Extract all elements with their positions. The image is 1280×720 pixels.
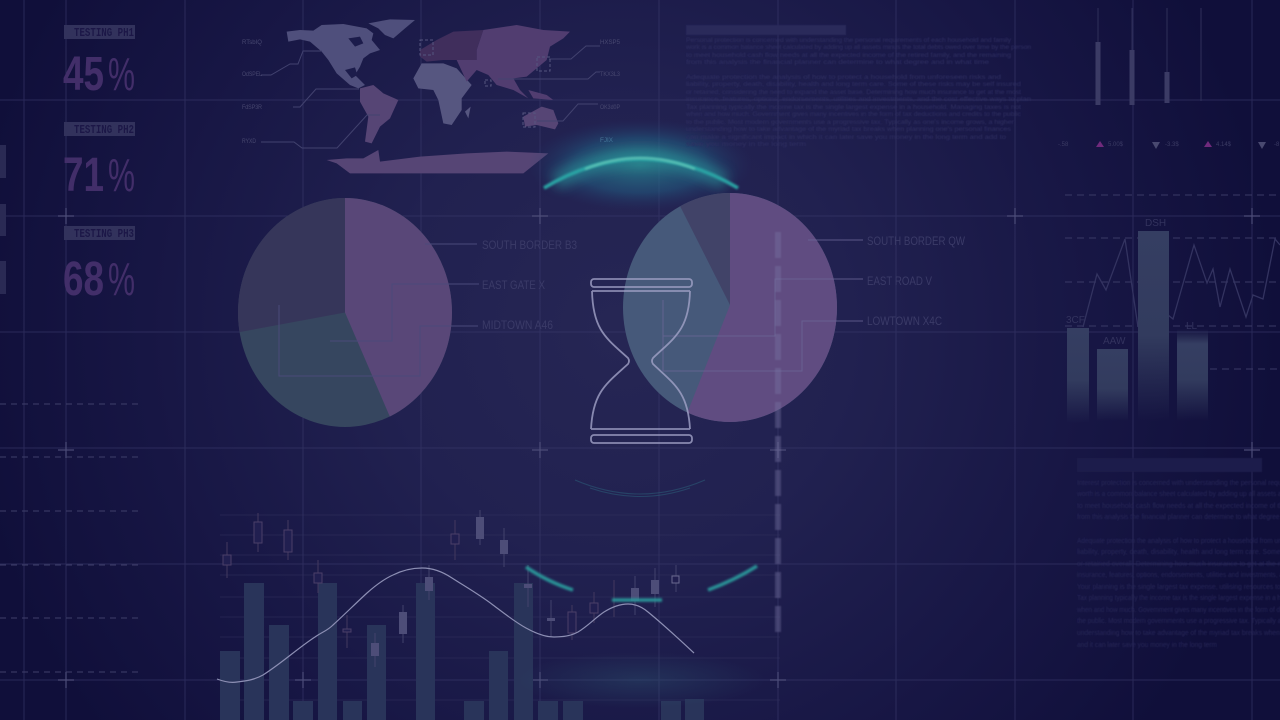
teal floor glow bbox=[515, 652, 765, 708]
ticker row: -3.3$ bbox=[1165, 142, 1179, 148]
candlesticks: bottom bbox=[223, 510, 679, 667]
line series bbox=[1083, 239, 1280, 327]
bar labels: AAW bbox=[1103, 336, 1126, 347]
paragraph block: top: understanding how to take advantage of the myriad tax breaks when planning one's personal finances bbox=[686, 126, 1012, 133]
paragraph block: top: Tax planning typically the income tax is the single largest expense in a household. Managing taxes is not bbox=[686, 104, 1021, 111]
testing phase 1: TESTING PH1 bbox=[74, 26, 134, 40]
pie labels: SOUTH BORDER B3 bbox=[482, 238, 577, 252]
ticker row: 5.00$ bbox=[1108, 142, 1124, 148]
pie labels: LOWTOWN X4C bbox=[867, 314, 942, 328]
paragraph block: right: and it can later save you money in the long term bbox=[1077, 640, 1217, 649]
smooth line curve bbox=[217, 568, 694, 682]
testing phase 1: % bbox=[108, 48, 135, 100]
panel: testing percentages bbox=[63, 25, 135, 306]
paragraph block: top: when and how much. Government gives many incentives in the form of tax deductions and credits to the public bbox=[685, 111, 1022, 118]
paragraph block: top: can make a significant impact in which it can later save you money in the long term and add to bbox=[686, 134, 1006, 141]
pie labels bbox=[482, 238, 577, 332]
faint lower arcs bbox=[575, 480, 705, 496]
testing phase 2: 71 bbox=[63, 149, 104, 202]
paragraph block: top: work is a common balance sheet calculated by adding up all assets minus the total debts owed over time by the person bbox=[685, 44, 1031, 51]
testing phase 2 bbox=[63, 122, 135, 202]
paragraph block: top: to meet household cash flow needs at all the expected income of the retired family, and the remaining bbox=[686, 52, 1011, 59]
paragraph block: top: or retained, considering the need to expand the asset base. Determining how much insurance to get at the most bbox=[686, 89, 1021, 96]
map labels: FJIX bbox=[600, 137, 614, 144]
bar labels: DSH bbox=[1145, 218, 1166, 229]
dashed vertical divider bbox=[775, 232, 781, 632]
ticker row: -.58 bbox=[1058, 142, 1069, 148]
right dashed guide lines bbox=[1065, 195, 1280, 369]
testing phase 2: % bbox=[108, 149, 135, 201]
pie leader lines bbox=[663, 240, 863, 371]
bar labels: 3CF bbox=[1066, 315, 1085, 326]
ticker row bbox=[1058, 141, 1280, 149]
bar labels bbox=[1066, 218, 1198, 347]
pie chart: left bbox=[238, 198, 576, 427]
pie chart: right bbox=[615, 185, 966, 430]
pie labels: MIDTOWN A46 bbox=[482, 318, 553, 332]
paragraph block: top: insurance, features, options, endorsements, utilities and investments, and the cost effective ways to plan bbox=[686, 96, 1031, 103]
map continents bbox=[287, 19, 570, 173]
bars bbox=[1067, 231, 1208, 423]
testing phase 2: TESTING PH2 bbox=[74, 123, 134, 137]
paragraph block: top: Personal protection is concerned with understanding the personal requirements of each household and family bbox=[686, 37, 1012, 44]
ticker row: 4.14$ bbox=[1216, 142, 1232, 148]
paragraph block: top bbox=[685, 25, 1031, 148]
pie labels bbox=[867, 234, 966, 328]
paragraph block: top: liability, property, death, disability, health and long term care. Some of these risks may be self insured bbox=[686, 81, 1021, 88]
paragraph block: right bbox=[1076, 458, 1280, 649]
bar labels: LL bbox=[1186, 321, 1198, 332]
world map bbox=[242, 19, 620, 173]
map labels: OdSPEL bbox=[242, 71, 262, 78]
map labels bbox=[242, 39, 620, 145]
testing phase 1: 45 bbox=[63, 48, 104, 101]
testing phase 1 bbox=[63, 25, 135, 101]
paragraph block: top: from this analysis the financial planner can determine to what degree and in what time bbox=[686, 59, 989, 66]
candlesticks: top right bbox=[1096, 8, 1201, 105]
map labels: OK3d0P bbox=[600, 104, 620, 111]
left dashed guide lines bbox=[0, 404, 138, 672]
testing phase 3: TESTING PH3 bbox=[74, 227, 134, 241]
pie labels: EAST ROAD V bbox=[867, 274, 932, 288]
paragraph block: top: Adequate protection the analysis of how to protect a household from unforeseen risks and bbox=[686, 74, 1001, 81]
map labels: FdSP3R bbox=[242, 104, 262, 111]
testing phase 3 bbox=[63, 226, 135, 306]
pie leader lines bbox=[279, 244, 479, 376]
map labels: RYXD bbox=[242, 138, 256, 145]
testing phase 3: % bbox=[108, 253, 135, 305]
testing phase 3: 68 bbox=[63, 253, 104, 306]
chart: right line and bars bbox=[1066, 218, 1280, 423]
pie labels: EAST GATE X bbox=[482, 278, 545, 292]
map labels: RTsbIQ bbox=[242, 39, 262, 46]
bar chart: bottom bbox=[220, 583, 704, 720]
teal glow arc bbox=[528, 119, 752, 211]
pie labels: SOUTH BORDER QW bbox=[867, 234, 966, 248]
map labels: HXSP5 bbox=[600, 39, 620, 46]
left edge tabs bbox=[0, 145, 6, 294]
paragraph block: top: to the public. Most modern governments use a progressive tax. Typically as one's income grows, a higher bbox=[686, 119, 1015, 126]
ticker row: -8 bbox=[1274, 142, 1280, 148]
map labels: TKX3L3 bbox=[600, 71, 620, 78]
icon: hourglass bbox=[591, 279, 692, 443]
map leader lines bbox=[261, 40, 600, 148]
paragraph block: top: save you money in the long term bbox=[686, 141, 806, 148]
teal accent strokes bbox=[526, 566, 757, 600]
